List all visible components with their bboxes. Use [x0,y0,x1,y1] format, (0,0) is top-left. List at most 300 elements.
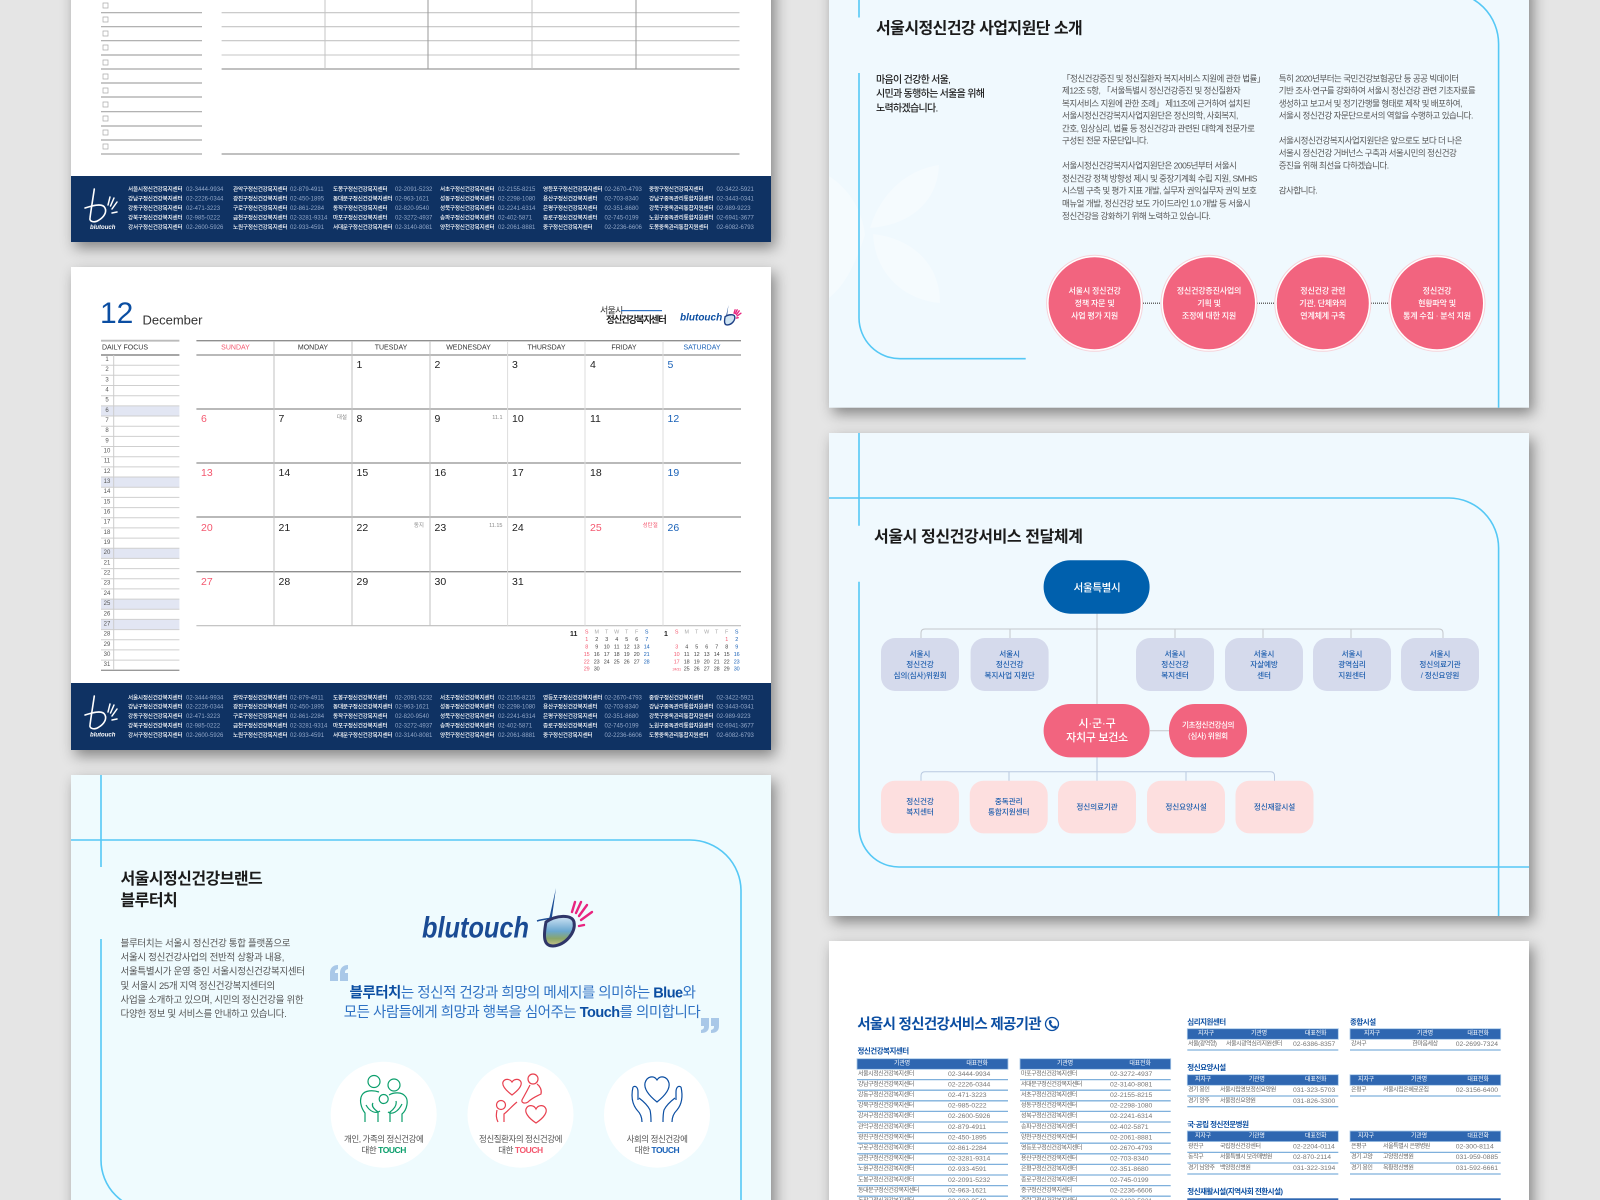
directory text: 서초구정신건강복지센터 [440,694,494,702]
dates: 27 [201,576,213,588]
directory text: 서대문구정신건강복지센터 [333,731,392,739]
dates: 11.15 [489,523,502,529]
directory text: 은평구정신건강복지센터 [543,204,597,212]
table A: 02-879-4911 [948,1124,986,1131]
directory text: 02-2241-6314 [498,206,536,212]
directory text: 강북구중독관리통합지원센터 [649,204,713,212]
directory text: 송파구정신건강복지센터 [440,214,494,222]
directory text: 02-402-5871 [498,724,533,730]
table B: 성동구정신건강복지센터 [1021,1101,1077,1109]
node: 자살예방 센터: 센터 [1257,670,1271,680]
node: 정신건강 복지센터: 복지센터 [906,806,934,816]
mini calendar: January: 21 [714,659,720,665]
icon: hands and heart [632,1077,682,1122]
node: 심의위원회: 정신건강 [906,659,934,669]
weekday header: TUESDAY [375,344,408,352]
directory text: 서울시정신건강복지센터 [128,694,182,702]
description text: 블루터치는 서울시 정신건강 통합 플랫폼으로 [120,938,291,950]
mini calendar: November: 11 [614,645,620,651]
body column 1: 복지서비스 지원에 관한 조례」 제11조에 근거하여 설치된 [1062,98,1250,108]
pink circle: policy: 사업 평가 지원 [1071,310,1118,320]
directory text: 서울시정신건강복지센터 [128,185,182,193]
table B: 02-2155-8215 [1110,1092,1153,1099]
directory text: 노원구정신건강복지센터 [233,223,287,231]
daily focus column: 2 [105,367,109,373]
directory text: 02-2061-8881 [498,733,536,739]
directory text: 동작구정신건강복지센터 [333,204,387,212]
table B: 마포구정신건강복지센터 [1021,1069,1077,1077]
mini calendar: November: 7 [645,637,648,643]
directory text: 02-3444-9934 [186,696,224,702]
daily focus column: 23 [104,581,111,587]
mini calendar: January: 7 [715,645,718,651]
blutouch logo [422,888,592,946]
table B: 02-745-0199 [1110,1177,1149,1184]
table: public hospitals 2: 기관명 [1411,1131,1427,1139]
node: 기초정신건강심의위원회: 기초정신건강심의 [1182,720,1234,730]
directory text: 관악구정신건강복지센터 [233,694,287,702]
directory text: 종로구정신건강복지센터 [543,722,597,730]
node: 정신의료기관: 정신의료기관 [1419,659,1461,669]
daily focus column: 16 [104,510,111,516]
node: 자치구 보건소: 시·군·구 [1078,717,1116,730]
table: mental care facilities 2: 지자구 [1358,1075,1375,1083]
node: 기초정신건강심의위원회 [1169,704,1247,757]
mini calendar: November: S [645,630,649,636]
directory text: 02-985-0222 [186,724,221,730]
directory text: 강동구정신건강복지센터 [128,712,182,720]
table: general facility [1350,1016,1501,1050]
quote text: 모든 사람들에게 희망과 행복을 심어주는 Touch를 의미합니다 [344,1004,700,1021]
mini calendar: January: 12 [694,652,700,658]
mini calendar: January: 8 [725,645,728,651]
dates: 성탄절 [643,521,658,529]
dates: 10 [512,413,524,425]
mini calendar: November: 14 [644,645,650,651]
pink circle: policy: 서울시 정신건강 [1069,286,1122,296]
directory text: 02-3443-0341 [716,704,755,710]
table: public hospitals: 국·공립 정신전문병원 [1187,1119,1249,1129]
body column 2: 특히 2020년부터는 국민건강보험공단 등 공공 빅데이터 [1279,73,1459,83]
directory text: 양천구정신건강복지센터 [440,731,494,739]
mini calendar: November: 29 [584,666,590,672]
mini calendar: January: F [725,630,729,636]
table: public hospitals: 경기 남양주 [1188,1164,1215,1172]
directory text: 동대문구정신건강복지센터 [333,194,392,202]
table: public hospitals 2: 고양정신병원 [1383,1153,1413,1161]
table: mental care facilities [1187,1062,1338,1107]
body column 2 [1279,73,1476,196]
table A: 금천구정신건강복지센터 [858,1154,914,1162]
directory text: 관악구정신건강복지센터 [233,185,287,193]
daily focus column: 25 [104,601,111,607]
mini calendar: January: T [715,630,719,636]
table A: 기관명 [894,1059,910,1067]
heading: 서울시 정신건강서비스 제공기관 [857,1016,1041,1033]
table B: 영등포구정신건강복지센터 [1021,1144,1082,1152]
icon: phone [1046,1018,1058,1030]
mini calendar: November: 8 [585,645,588,651]
mini calendar: January: W [704,630,710,636]
table B: 은평구정신건강복지센터 [1021,1165,1077,1173]
footer: directory [71,176,771,242]
weekday header: SUNDAY [221,344,250,352]
node: 기초정신건강심의위원회: (심사) 위원회 [1188,730,1228,740]
directory text: 02-3140-8081 [395,225,433,231]
directory text: 광진구정신건강복지센터 [233,194,287,202]
table: general facility: 기관명 [1417,1029,1433,1037]
touch circle: patients [468,1062,574,1168]
center logo: 정신건강복지센터 [606,314,666,326]
quote text [344,984,700,1021]
mini calendar: January: S [675,630,679,636]
table: public hospitals: 지자구 [1195,1131,1212,1139]
daily focus column: 1 [105,357,109,363]
table B: 02-2241-6314 [1110,1113,1153,1120]
body column 1 [1062,73,1265,221]
table A [857,1059,1008,1200]
mini calendar: November: 10 [604,645,610,651]
directory text: 02-861-2284 [290,206,325,212]
directory text: 02-2298-1080 [498,196,536,202]
mini calendar: January: 30 [734,666,740,672]
directory text: 양천구정신건강복지센터 [440,223,494,231]
touch circle: society: 사회의 정신건강에 [627,1134,687,1144]
table: public hospitals: 02-870-2114 [1293,1154,1331,1161]
directory text: 강북구정신건강복지센터 [128,722,182,730]
body column 2: 감사합니다. [1279,186,1317,196]
directory text: 강북구정신건강복지센터 [128,214,182,222]
table: general facility: 강서구 [1351,1040,1367,1048]
weekday header: WEDNESDAY [446,344,491,352]
body column 1: 시스템 구축 및 평가 지표 개발, 실무자 권익실무자 권익 보호 [1062,186,1257,196]
dates: 3 [512,359,518,371]
directory text: 02-2226-0344 [186,196,224,202]
directory text: 도봉구정신건강복지센터 [333,694,387,702]
table: psychological support center: 기관명 [1251,1029,1267,1037]
mini calendar: January: 24/31 [672,667,681,671]
daily focus column: 5 [105,398,109,404]
node: 광역심리 지원센터: 광역심리 [1338,659,1366,669]
daily focus column: 10 [104,448,111,454]
table: public hospitals 2: 지자구 [1358,1131,1375,1139]
directory text: 02-3140-8081 [395,733,433,739]
table A: 02-3281-9314 [948,1156,991,1162]
body column 2: 서울시정신건강복지사업지원단은 앞으로도 보다 더 나은 [1279,135,1463,145]
body column 2: 서울시 정신건강 거버넌스 구축과 서울시민의 정신건강 [1279,148,1457,158]
node: 광역심리 지원센터: 서울시 [1342,648,1362,658]
white b logo [85,696,117,738]
center logo: 서울시 [600,306,623,316]
directory text: 02-351-8680 [604,206,639,212]
weekday header: SATURDAY [683,344,721,352]
node: 복지센터: 서울시 [1165,648,1185,658]
mini calendar: November: 5 [625,637,628,643]
dates: 19 [668,467,679,479]
mini calendar: January: 25 [684,666,690,672]
table B: 용산구정신건강복지센터 [1021,1154,1077,1162]
description text: 다양한 정보 및 서비스를 안내하고 있습니다. [120,1008,286,1020]
dates [201,359,679,588]
directory text: 용산구정신건강복지센터 [543,702,597,710]
body column 1: 간호, 임상심리, 법률 등 정신건강과 관련된 대학계 전문가로 [1062,123,1255,133]
table: public hospitals 2: 은평구 [1351,1142,1367,1150]
blutouch logo small: blutouch [680,312,722,324]
table: mental care facilities: 지자구 [1195,1075,1212,1083]
dates: 2 [434,359,440,371]
node: 복지센터: 정신건강 [1161,659,1189,669]
heading: 서울시정신건강 사업지원단 소개 [876,20,1082,38]
heading: 블루터치 [120,892,177,910]
daily focus column: 19 [104,540,111,546]
table: public hospitals: 031-322-3194 [1293,1165,1336,1172]
heading: 서울시 정신건강서비스 전달체계 [874,528,1083,546]
table: general facility: 종합시설 [1350,1016,1376,1026]
directory text: 02-6082-6793 [716,733,755,739]
mini calendar: January: 1 [664,631,668,638]
daily focus column: 17 [104,520,111,526]
mini calendar: November: 16 [594,652,600,658]
directory text: 강남구중독관리통합지원센터 [649,702,713,710]
node: 심의위원회 [881,638,959,691]
directory text: 마포구정신건강복지센터 [333,722,387,730]
directory text: 02-2155-8215 [498,696,536,702]
table: public hospitals 2: 경기 고양 [1351,1153,1373,1161]
node: 정신건강 복지센터: 정신건강 [906,796,934,806]
panel: November calendar bottom [71,0,771,242]
table: public hospitals 2: 대표전화 [1467,1131,1489,1139]
table A: 02-985-0222 [948,1102,987,1110]
node: 광역심리 지원센터 [1313,638,1391,691]
table: public hospitals 2: 031-592-6661 [1456,1165,1498,1172]
mini calendar: November: 19 [624,652,630,658]
table: mental care facilities 2: 대표전화 [1467,1075,1489,1083]
directory text: 02-2226-0344 [186,704,224,710]
daily focus column: 4 [105,388,109,394]
directory text: 마포구정신건강복지센터 [333,214,387,222]
mini calendar: November: 25 [614,659,620,665]
mini calendar: November: M [594,630,599,636]
directory text: 02-2236-6606 [604,733,643,739]
lead statement: 시민과 동행하는 서울을 위해 [876,87,985,100]
weekday header: FRIDAY [611,344,637,352]
directory text: 노원구중독관리통합지원센터 [649,214,713,222]
directory text: 금천구정신건강복지센터 [233,214,287,222]
directory text: 강남구정신건강복지센터 [128,194,182,202]
body column 1: 정신건강을 강화하기 위해 노력하고 있습니다. [1062,211,1211,221]
directory text: 중랑구정신건강복지센터 [649,185,703,193]
dates: 15 [356,467,368,479]
dates: 22 [356,522,368,534]
table: public hospitals 2: 02-300-8114 [1456,1144,1494,1150]
table: public hospitals 2 [1350,1131,1501,1174]
mini calendar: November: F [635,630,639,636]
daily focus column: 9 [105,438,109,444]
touch circle: family [331,1062,437,1168]
directory text: 광진구정신건강복지센터 [233,702,287,710]
table A: 02-450-1895 [948,1134,987,1142]
directory text: 02-450-1895 [290,704,325,710]
dates: 30 [434,576,446,588]
dates: 6 [201,413,207,425]
table A: 서울시정신건강복지센터 [858,1069,914,1077]
dates: 28 [278,576,290,588]
mini calendar: November: 13 [634,645,640,651]
dates: 12 [668,413,679,425]
node: 심의위원회: 서울시 [910,648,930,658]
daily focus column: 31 [104,662,111,668]
table: psychological support center: 대표전화 [1305,1029,1327,1037]
month heading [100,297,203,330]
weekday header [221,344,721,352]
table: public hospitals 2: 031-959-0885 [1456,1154,1498,1161]
node: 자살예방 센터: 서울시 [1254,648,1274,658]
directory text: 중구정신건강복지센터 [543,223,593,231]
table: psychological support center: 서울(광역형) [1188,1040,1217,1048]
body column 1: 서울시정신건강복지사업지원단은 2005년부터 서울시 [1062,161,1236,171]
table A: 02-933-4591 [948,1166,987,1173]
white b logo: blutouch [90,225,116,231]
node: 정신의료기관 [1401,638,1479,691]
mini calendar: November: 24 [604,659,610,665]
daily focus column: 3 [105,377,109,383]
body column 1: 정신건강 정책 방향성 제시 및 중장기계획 수립 지원, SMHIS [1062,173,1258,183]
mini calendar: January: 28 [714,666,720,672]
table: general facility: 한마음세상 [1412,1040,1439,1048]
table A: 동대문구정신건강복지센터 [858,1186,919,1194]
dotted connectors [1143,302,1389,304]
panel: December calendar [71,267,771,750]
table: mental care facilities: 정신요양시설 [1187,1062,1226,1072]
daily focus column [101,341,179,670]
mini calendar: January: 4 [685,645,688,651]
mini calendar: January: 19 [694,659,700,665]
mini calendar: January: 5 [695,645,698,651]
table: public hospitals: 대표전화 [1305,1131,1327,1139]
node: 정신의료기관 [1058,781,1136,833]
footer: directory [71,683,771,750]
daily focus column: 21 [104,560,111,566]
directory text: 02-820-9540 [395,206,430,212]
directory text: 02-2061-8881 [498,225,536,231]
directory text: 성북구정신건강복지센터 [440,204,494,212]
pink circle: statistics: 정신건강 [1423,286,1452,296]
directory text: 강남구중독관리통합지원센터 [649,194,713,202]
touch circle: society: 대한 TOUCH [635,1145,680,1155]
node: 심의위원회: 심의(심사)위원회 [893,670,947,680]
daily focus column: 20 [104,550,111,556]
dates: 7 [278,413,284,425]
directory text: 강북구중독관리통합지원센터 [649,712,713,720]
directory text: 성동구정신건강복지센터 [440,194,494,202]
mini calendar: January: 29 [724,666,730,672]
pink circle: planning: 정신건강증진사업의 [1177,286,1241,296]
node: 정신요양시설 [1147,781,1225,833]
daily focus column: 22 [104,571,111,577]
table A: 구로구정신건강복지센터 [858,1144,914,1152]
frame lines [829,433,1529,916]
panel: blutouch brand [71,775,771,1200]
icon: hearts and people [496,1074,546,1123]
directory text: 02-2670-4793 [604,696,643,702]
table: psychological support center [1187,1016,1338,1050]
table: psychological support center: 심리지원센터 [1187,1016,1226,1026]
directory text: 02-989-9223 [716,206,751,212]
table A: 02-963-1621 [948,1188,987,1194]
table A: 노원구정신건강복지센터 [858,1165,914,1173]
directory text: 도봉중독관리통합지원센터 [649,223,708,231]
directory text: 02-879-4911 [290,696,324,702]
blutouch logo small [680,305,741,325]
pink circle: network [1275,255,1371,351]
daily focus column: 8 [105,428,109,434]
node: 복지사업 지원단 [971,638,1049,691]
lead statement [876,73,985,114]
daily focus column: 29 [104,642,111,648]
frame lines [859,0,1499,408]
node: Seoul city [1044,560,1150,614]
directory text: 구로구정신건강복지센터 [233,204,287,212]
table A: 강동구정신건강복지센터 [858,1090,914,1098]
mini calendar: January: 10 [674,652,680,658]
directory text: 02-3281-9314 [290,216,328,222]
table: mental care facilities: 기관명 [1249,1075,1265,1083]
directory text: 02-2298-1080 [498,704,536,710]
mini calendar: January: 15 [724,652,730,658]
table B: 양천구정신건강복지센터 [1021,1133,1077,1141]
dates: 25 [590,522,602,534]
table: public hospitals: 02-2204-0114 [1293,1144,1335,1150]
mini calendar: January: 3 [675,645,678,651]
mini calendar: January: 14 [714,652,720,658]
node: 자살예방 센터: 자살예방 [1250,659,1278,669]
description text: 서울특별시가 운영 중인 서울시정신건강복지센터 [120,966,305,978]
opening quote mark [330,965,348,981]
daily focus column: 15 [104,499,111,505]
node: 복지사업 지원단: 서울시 [999,648,1020,658]
directory text: 02-2241-6314 [498,714,536,720]
table B: 02-2236-6606 [1110,1188,1153,1194]
directory text: 02-2155-8215 [498,187,536,193]
description text [120,938,305,1020]
table: mental care facilities 2: 은평구 [1351,1086,1367,1094]
directory text: 02-2600-5926 [186,225,224,231]
node: 복지센터: 복지센터 [1161,670,1189,680]
directory text: 송파구정신건강복지센터 [440,722,494,730]
mini calendar: November: 21 [644,652,650,658]
description text: 서울시 정신건강사업의 전반적 상황과 내용, [120,952,284,964]
directory text: 02-6941-3677 [716,724,755,730]
directory text: 구로구정신건강복지센터 [233,712,287,720]
table B [1020,1059,1171,1200]
mini calendar: November: 22 [584,659,590,665]
node: 중독관리 통합지원센터 [970,781,1048,833]
heading: 서울시정신건강브랜드 [120,870,263,888]
mini calendar: November: 28 [644,659,650,665]
table B: 02-2670-4793 [1110,1145,1153,1152]
node: 정신재활시설: 정신재활시설 [1254,802,1295,812]
table: psychological support center: 지자구 [1198,1029,1215,1037]
body column 1: 매뉴얼 개발, 정신건강 보도 가이드라인 1.0 개발 등 서울시 [1062,198,1250,208]
node: 정신요양시설: 정신요양시설 [1165,802,1207,812]
dates: 11.1 [492,415,502,421]
org chart connectors [921,613,1443,781]
dates: 20 [201,522,213,534]
table: public hospitals: 광진구 [1188,1142,1204,1150]
mini calendar: November: 27 [634,659,640,665]
mini calendar: January: 13 [704,652,710,658]
directory text: 동작구정신건강복지센터 [333,712,387,720]
